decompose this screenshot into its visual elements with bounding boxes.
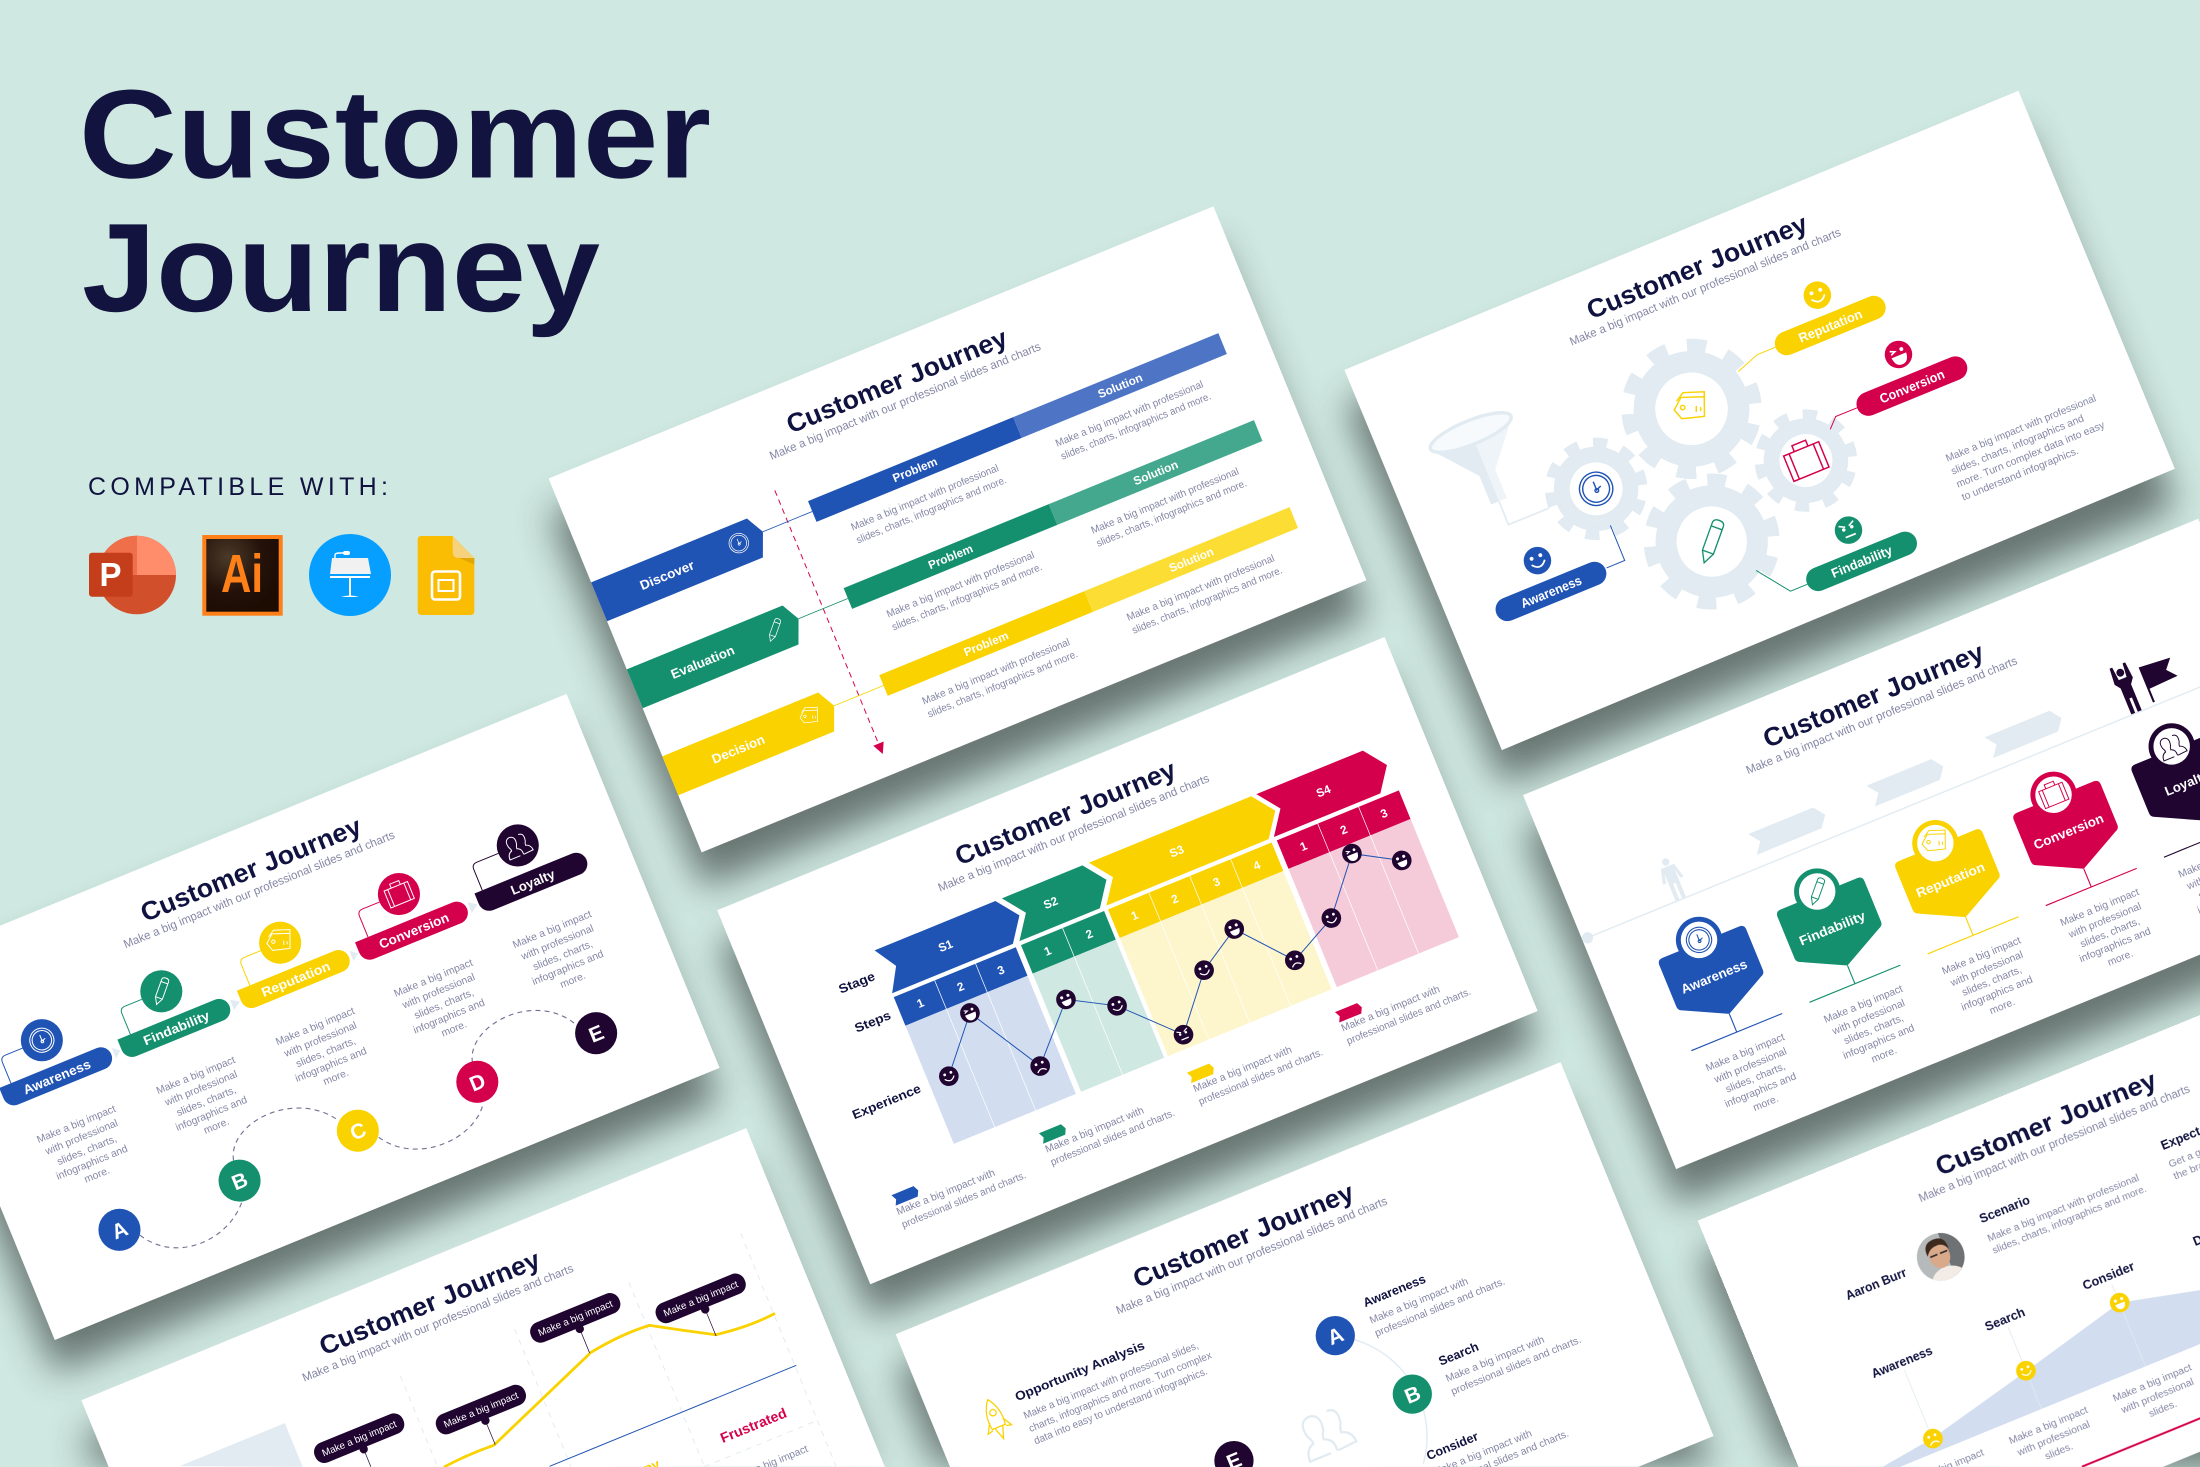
- stage: awareness: Awareness: [1361, 1272, 1428, 1310]
- step: findability: with professional: [163, 1069, 239, 1109]
- badge: C: C: [347, 1118, 370, 1145]
- pin: findability: Make a big impact: [1823, 984, 1905, 1026]
- stage: search: with professional: [2015, 1419, 2092, 1459]
- stage: awareness: [1860, 1340, 1986, 1467]
- row: decision: Decision: [709, 732, 767, 767]
- stage: consider: slides.: [2147, 1399, 2179, 1420]
- slide subtitle: Make a big impact with our professional slides and charts: [1114, 1195, 1389, 1317]
- main title: [79, 64, 711, 338]
- step: conversion: infographics and: [412, 997, 487, 1037]
- pin: awareness: infographics and: [1723, 1071, 1798, 1110]
- pin: conversion: with professional: [2066, 901, 2143, 941]
- row: evaluation: Solution: [1132, 458, 1180, 488]
- step: findability: more.: [202, 1117, 231, 1137]
- pin: awareness: Make a big impact: [1704, 1032, 1787, 1074]
- main title: Journey: [82, 197, 600, 338]
- badge: B: B: [229, 1168, 251, 1195]
- column: S1: [875, 895, 1090, 1144]
- stage: search: Make a big impact: [2008, 1405, 2090, 1447]
- slide subtitle: Make a big impact with our professional slides and charts: [1744, 654, 2019, 777]
- column: S2: 2: [1084, 927, 1095, 942]
- step: awareness: Make a big impact: [35, 1104, 118, 1146]
- legend: S3: professional slides and charts.: [1197, 1047, 1325, 1108]
- persona panel: [180, 1423, 303, 1467]
- legend: S4: [1335, 962, 1473, 1047]
- badge: B: [212, 1153, 267, 1208]
- pin: awareness: slides, charts,: [1724, 1061, 1787, 1096]
- step: conversion: slides, charts,: [413, 988, 476, 1022]
- step: loyalty: infographics and: [531, 949, 606, 988]
- row: evaluation: [627, 414, 1277, 732]
- stage: consider: Make a big impact: [2111, 1362, 2194, 1405]
- stage: consider: [1424, 1397, 1571, 1467]
- step: conversion: [336, 853, 510, 1057]
- slide subtitle: Make a big impact with our professional slides and charts: [122, 829, 397, 951]
- stage: consider: [2067, 1254, 2200, 1431]
- slide subtitle: Make a big impact with our professional slides and charts: [936, 772, 1211, 895]
- column: S4: 3: [1379, 806, 1390, 821]
- column: S1: 3: [996, 963, 1007, 978]
- step: awareness: more.: [83, 1165, 112, 1186]
- stage: awareness: [1307, 1244, 1507, 1361]
- row: discover: [591, 327, 1242, 645]
- line chart: experience: [916, 824, 1444, 1136]
- icon: rocket: [976, 1395, 1015, 1443]
- legend: S2: professional slides and charts.: [1049, 1108, 1177, 1169]
- callout: awareness: [1478, 517, 1630, 625]
- step: findability: slides, charts,: [175, 1085, 238, 1119]
- pin: conversion: [1999, 755, 2168, 982]
- stage: consider: with professional: [2119, 1377, 2196, 1417]
- column: S2: 1: [1042, 944, 1054, 959]
- text block: scenario: slides, charts, infographics and more.: [1991, 1184, 2148, 1257]
- icon: Illustrator: Ai: [221, 544, 263, 604]
- pin: reputation: infographics and: [1960, 974, 2035, 1014]
- badge: E: E: [586, 1021, 607, 1048]
- icon: Keynote: [309, 534, 391, 616]
- column: S3: 1: [1129, 908, 1141, 923]
- text block: Make a big impact with professional: [1944, 393, 2098, 465]
- step: loyalty: slides, charts,: [532, 939, 594, 973]
- panel: gears slide: [1344, 91, 2175, 750]
- stage: consider: Consider: [1424, 1429, 1480, 1463]
- tooltip 2: [433, 1382, 539, 1463]
- blue baseline: [550, 1365, 796, 1466]
- column: S3: 4: [1251, 859, 1263, 873]
- row: discover: Discover: [638, 557, 696, 593]
- text block: opportunity analysis: charts, infographics and more. Turn complex: [1027, 1350, 1214, 1435]
- column: S3: S3: [1168, 843, 1186, 860]
- legend: S2: [1039, 1083, 1177, 1169]
- pin: awareness: more.: [1752, 1094, 1780, 1114]
- badge: D: [450, 1054, 505, 1109]
- row labels: [804, 969, 923, 1122]
- step: awareness: with professional: [43, 1118, 120, 1158]
- panel: stages and experience slide: [717, 637, 1538, 1284]
- pin: loyalty: [2117, 706, 2200, 934]
- row: discover: slides, charts, infographics and more.: [855, 475, 1008, 546]
- row: decision: [662, 501, 1313, 819]
- slide title: Customer Journey: [1932, 1066, 2161, 1182]
- row: evaluation: Problem: [926, 542, 975, 572]
- column: S4: [1256, 744, 1459, 988]
- pin: reputation: more.: [1988, 997, 2017, 1017]
- column: S3: 2: [1170, 892, 1181, 907]
- row: evaluation: Make a big impact with professional: [885, 550, 1036, 620]
- row: decision: slides, charts, infographics and more.: [1131, 565, 1284, 637]
- slide title: Customer Journey: [1129, 1178, 1359, 1294]
- column: S4: 2: [1338, 823, 1350, 838]
- text block: to understand infographics.: [1960, 446, 2080, 504]
- icon: people: [1294, 1404, 1357, 1462]
- icon: Illustrator: [202, 535, 283, 616]
- text block: more. Turn complex data into easy: [1955, 420, 2107, 491]
- step: reputation: slides, charts,: [295, 1036, 358, 1070]
- icon: funnel: [1426, 405, 1549, 541]
- slide title: Customer Journey: [316, 1246, 545, 1361]
- pin: reputation: [1881, 803, 2050, 1031]
- step: loyalty: [456, 804, 629, 1008]
- icon: start person: [1654, 854, 1691, 903]
- step: findability: Findability: [141, 1008, 212, 1048]
- panel: analysis circle slide: [896, 1062, 1714, 1467]
- text block: slides, charts, infographics and: [1950, 413, 2086, 478]
- row: decision: Problem: [962, 629, 1011, 659]
- text block: opportunity analysis: Make a big impact with professional slides,: [1022, 1341, 1200, 1422]
- emotion curve: [423, 1279, 781, 1467]
- slide title: Customer Journey: [783, 324, 1012, 439]
- stage: awareness: professional slides and charts.: [1374, 1276, 1507, 1340]
- step: reputation: Reputation: [259, 958, 332, 1000]
- row labels: Stage: [837, 969, 877, 997]
- step: awareness: Awareness: [21, 1056, 93, 1097]
- column: S4: 1: [1298, 839, 1310, 854]
- icon: PowerPoint: P: [99, 556, 122, 593]
- stage: search: Search: [1983, 1305, 2027, 1334]
- callout: findability: Findability: [1829, 542, 1895, 581]
- legend: S1: professional slides and charts.: [900, 1170, 1028, 1231]
- text block: opportunity analysis: Opportunity Analysis: [1013, 1338, 1147, 1404]
- callout: reputation: Reputation: [1796, 306, 1864, 346]
- step: loyalty: Make a big impact: [511, 909, 594, 951]
- pin: findability: [1763, 851, 1932, 1079]
- stage: search: Search: [1437, 1340, 1481, 1369]
- main title: Customer: [79, 64, 711, 204]
- row: evaluation: Evaluation: [669, 642, 737, 682]
- callout: conversion: [1809, 319, 1971, 432]
- pin: findability: more.: [1870, 1045, 1899, 1066]
- stage: awareness: Awareness: [1869, 1344, 1935, 1381]
- slide subtitle: Make a big impact with our professional slides and charts: [1568, 226, 1843, 348]
- step: reputation: Make a big impact: [274, 1006, 357, 1048]
- pin: reputation: Make a big impact: [1941, 935, 2023, 977]
- stage: consider: Consider: [2081, 1259, 2137, 1293]
- step: reputation: infographics and: [294, 1046, 369, 1085]
- panel: persona journey slide: [1698, 1015, 2200, 1467]
- emotion area chart: [1859, 1173, 2200, 1467]
- step: awareness: infographics and: [55, 1144, 130, 1183]
- callout: awareness: Awareness: [1518, 573, 1584, 611]
- badge: A: A: [109, 1217, 131, 1244]
- stage: search: Make a big impact with: [1444, 1335, 1546, 1385]
- step: reputation: more.: [322, 1068, 351, 1088]
- pink baseline: [2082, 1290, 2200, 1467]
- persona photo: [1916, 1232, 1965, 1281]
- badge: E: [569, 1006, 624, 1061]
- row: evaluation: Make a big impact with professional: [1090, 466, 1241, 537]
- column: S3: 3: [1211, 875, 1223, 890]
- badge: A: [92, 1202, 147, 1257]
- legend: S4: Make a big impact with: [1340, 984, 1442, 1034]
- panel: problem and solution slide: [549, 206, 1366, 852]
- stage: search: [1963, 1297, 2100, 1467]
- stage: E badge: [1208, 1435, 1260, 1467]
- label: frustrated: Frustrated: [718, 1405, 789, 1446]
- tooltip 3: [527, 1290, 634, 1371]
- legend: S2: Make a big impact with: [1044, 1105, 1146, 1156]
- step: conversion: Conversion: [377, 910, 451, 952]
- legend: S1: [890, 1145, 1028, 1231]
- text block: scenario: [1977, 1151, 2148, 1257]
- dashed timeline arrow: [770, 488, 888, 756]
- text block: scenario: Scenario: [1977, 1193, 2032, 1226]
- slide title: Customer Journey: [951, 756, 1181, 871]
- row labels: Experience: [850, 1082, 923, 1122]
- pin: findability: Findability: [1797, 908, 1868, 948]
- step: findability: Make a big impact: [155, 1055, 237, 1097]
- step: conversion: more.: [440, 1019, 469, 1039]
- pin: awareness: Awareness: [1679, 956, 1749, 997]
- pin: conversion: Make a big impact: [2059, 887, 2141, 929]
- column: S4: S4: [1314, 783, 1333, 800]
- step: loyalty: more.: [559, 971, 588, 991]
- tooltip 2: Make a big impact: [442, 1390, 520, 1431]
- panel: pins timeline slide: [1523, 519, 2200, 1169]
- column: S1: S1: [937, 937, 955, 955]
- slide title: Customer Journey: [1583, 210, 1812, 325]
- row: discover: Make a big impact with professional: [850, 463, 1001, 533]
- column: S3: [1089, 790, 1346, 1056]
- icon: PowerPoint: [89, 536, 176, 614]
- text block: opportunity analysis: [1013, 1316, 1219, 1448]
- row: decision: slides, charts, infographics and more.: [926, 649, 1080, 720]
- column: S2: S2: [1042, 894, 1060, 912]
- step: reputation: [218, 901, 391, 1105]
- pin: findability: slides, charts,: [1842, 1013, 1905, 1047]
- stage: search: [1384, 1303, 1583, 1420]
- pin: awareness: with professional: [1712, 1046, 1789, 1086]
- pin: findability: infographics and: [1842, 1023, 1916, 1062]
- text block: expectations: [2159, 1096, 2200, 1183]
- timeline line: [1580, 658, 2200, 945]
- stage: search: slides.: [2044, 1441, 2075, 1463]
- pin: reputation: Reputation: [1914, 859, 1987, 901]
- step: findability: [99, 950, 272, 1154]
- compatible with label: COMPATIBLE WITH:: [88, 473, 388, 501]
- row: discover: Solution: [1096, 371, 1145, 401]
- callout: reputation: [1718, 260, 1889, 375]
- row: decision: Make a big impact with professional: [1125, 553, 1276, 624]
- slide subtitle: Make a big impact with our professional slides and charts: [768, 340, 1043, 463]
- step: awareness: slides, charts,: [56, 1134, 119, 1168]
- persona name: Aaron Burr: [1844, 1266, 1909, 1303]
- pin: awareness: [1645, 900, 1814, 1127]
- stage: search: B: [1401, 1382, 1424, 1409]
- stage: search: professional slides and charts.: [1450, 1335, 1583, 1398]
- small connecting arrows: [112, 899, 480, 1058]
- column: S1: 1: [915, 996, 927, 1011]
- row: discover: Make a big impact with professional: [1054, 379, 1205, 450]
- row: evaluation: slides, charts, infographics and more.: [1095, 478, 1249, 550]
- slide subtitle: Make a big impact with our professional slides and charts: [1917, 1082, 2192, 1205]
- arrows along timeline: [1748, 708, 2066, 855]
- slide title: Customer Journey: [137, 812, 366, 928]
- badge: C: [330, 1103, 385, 1158]
- icon: Google Slides: [418, 536, 474, 615]
- text block: [1944, 393, 2114, 504]
- pin: conversion: infographics and: [2078, 926, 2153, 965]
- row: decision: Make a big impact with professional: [921, 637, 1072, 707]
- legend: S1: Make a big impact with: [895, 1168, 997, 1218]
- journey arc: [1336, 1316, 1443, 1467]
- column: S1: 2: [955, 980, 967, 994]
- callout: findability: [1750, 495, 1921, 611]
- badge: D: D: [466, 1069, 489, 1096]
- step: findability: infographics and: [174, 1095, 249, 1134]
- step: conversion: with professional: [400, 972, 477, 1012]
- legend: S3: Make a big impact with: [1192, 1045, 1294, 1095]
- stage: awareness: Make a big impact with: [1368, 1276, 1470, 1327]
- legend: S4: professional slides and charts.: [1345, 987, 1473, 1047]
- row: discover: slides, charts, infographics and more.: [1059, 391, 1213, 463]
- pin: conversion: slides, charts,: [2079, 916, 2142, 950]
- tooltip 3: Make a big impact: [537, 1299, 615, 1339]
- tooltip 1: Make a big impact: [321, 1419, 399, 1459]
- pin: reputation: with professional: [1948, 950, 2025, 989]
- row labels: Steps: [853, 1008, 893, 1036]
- gear: conversion: [1746, 401, 1865, 520]
- stage: awareness: A: [1324, 1323, 1347, 1350]
- text block: opportunity analysis: data into easy to understand infographics.: [1033, 1366, 1209, 1447]
- pin: conversion: more.: [2106, 949, 2135, 969]
- gear: awareness: [1537, 429, 1656, 548]
- gear: findability: [1633, 463, 1791, 621]
- row: evaluation: slides, charts, infographics and more.: [891, 562, 1044, 633]
- icon: finish person and flag: [2108, 646, 2185, 716]
- tooltip 1: [311, 1410, 415, 1467]
- step: loyalty: Loyalty: [509, 866, 558, 898]
- row: decision: Solution: [1167, 545, 1216, 575]
- step: conversion: Make a big impact: [393, 958, 475, 1000]
- pin: reputation: slides, charts,: [1961, 965, 2024, 999]
- panel: emotion curve slide: [81, 1128, 885, 1467]
- gear: reputation: [1610, 327, 1773, 490]
- tooltip 4: Make a big impact: [662, 1279, 740, 1319]
- row: discover: Problem: [891, 455, 939, 485]
- pin: conversion: Conversion: [2031, 810, 2106, 853]
- pin: findability: with professional: [1830, 998, 1907, 1038]
- step: awareness: [0, 998, 154, 1202]
- text block: scenario: Make a big impact with professional: [1986, 1173, 2141, 1244]
- slide subtitle: Make a big impact with our professional slides and charts: [300, 1262, 576, 1385]
- dashed wavy path: [116, 994, 598, 1263]
- tooltip 4: [653, 1271, 760, 1354]
- panel: journey steps slide: [0, 694, 720, 1340]
- legend: S3: [1187, 1022, 1325, 1108]
- step: reputation: with professional: [282, 1020, 359, 1060]
- callout: conversion: Conversion: [1877, 367, 1947, 406]
- slide title: Customer Journey: [1759, 638, 1989, 754]
- step: loyalty: with professional: [519, 923, 596, 963]
- column: S2: [1002, 859, 1177, 1092]
